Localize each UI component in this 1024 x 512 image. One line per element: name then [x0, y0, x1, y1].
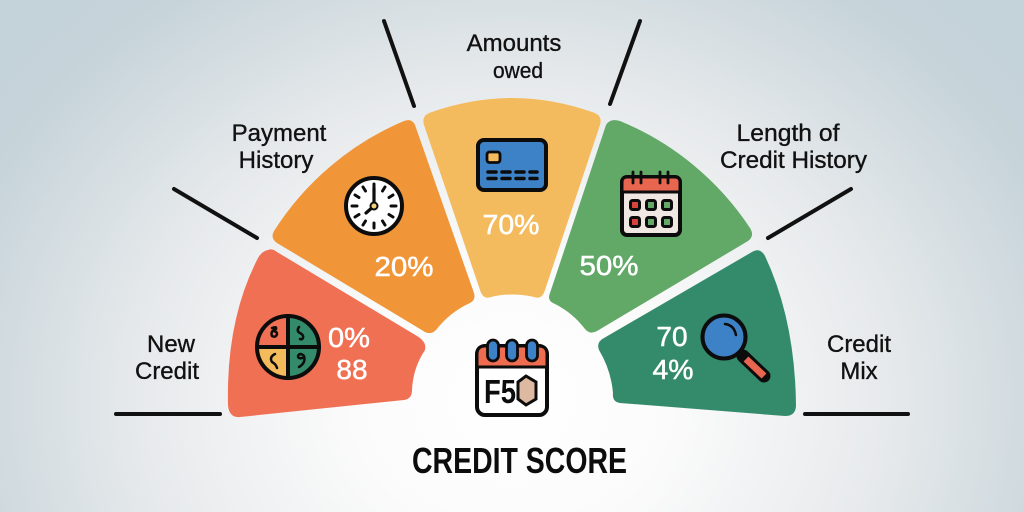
- label: length of credit history: Length of: [736, 120, 840, 147]
- value: new credit second line: 88: [336, 354, 368, 385]
- panel: payment history: [273, 120, 474, 333]
- title: CREDIT SCORE: [412, 440, 627, 481]
- label: credit mix: Mix: [840, 358, 878, 385]
- panel: length of credit history: [549, 120, 752, 333]
- label: credit mix: Credit: [827, 331, 891, 358]
- icon: calendar: [622, 172, 680, 235]
- value: length of credit history: 50%: [580, 250, 638, 281]
- label: amounts owed: owed: [493, 58, 543, 83]
- icon: score calendar: [477, 340, 547, 415]
- value: payment history: 20%: [374, 251, 434, 282]
- icon: credit card: [478, 140, 546, 190]
- label: payment history: Payment: [232, 120, 327, 147]
- pointer lines: [116, 21, 908, 414]
- panel: credit mix: [598, 250, 796, 416]
- icon: magnifying glass: [702, 316, 764, 376]
- label: length of credit history: Credit History: [720, 147, 867, 174]
- label: length of credit history: [720, 120, 867, 174]
- value: amounts owed: 70%: [482, 209, 540, 240]
- panel: new credit: [228, 249, 425, 417]
- label: payment history: [232, 120, 327, 174]
- label: payment history: History: [239, 147, 313, 174]
- label: new credit: [135, 331, 199, 385]
- icon: clock: [346, 178, 402, 234]
- label: new credit: Credit: [135, 358, 199, 385]
- label: credit mix: [827, 331, 891, 385]
- icon: segmented pie: [257, 316, 319, 378]
- icon: score calendar: F5: [484, 373, 516, 410]
- value: new credit: 0%: [328, 322, 370, 353]
- label: new credit: New: [147, 331, 196, 358]
- value: credit mix: 70: [656, 321, 688, 352]
- value: credit mix second line: 4%: [652, 354, 694, 385]
- panel: amounts owed: [423, 98, 601, 298]
- label: amounts owed: [467, 30, 561, 83]
- label: amounts owed: Amounts: [467, 30, 561, 57]
